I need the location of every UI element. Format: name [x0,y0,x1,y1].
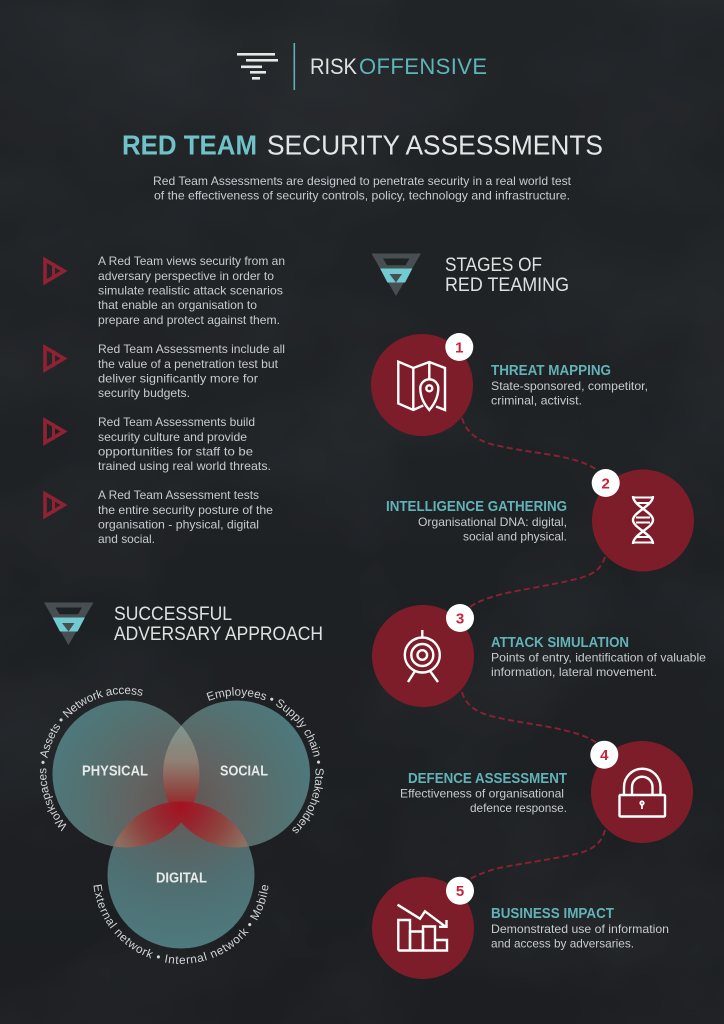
bullet icon 4 [45,494,64,516]
icon: dna [632,496,654,544]
bullet text 1: that enable an organisation to [98,298,257,312]
stage circle 5 [372,877,474,979]
stage text 3 [491,634,706,679]
stage text 4 [400,770,567,815]
stage text 4: defence response. [470,801,567,815]
bullet text 1: prepare and protect against them. [98,313,280,327]
title: SECURITY ASSESSMENTS [267,130,603,160]
logo divider [294,43,295,90]
badge 2 [592,469,620,497]
stage text 2: Organisational DNA: digital, [418,515,567,529]
connector 3 to 4 [462,692,597,743]
arc text: social: Employees • Supply chain • Stakeholders [206,687,324,834]
logo mark: funnel lines [237,53,278,80]
bullet text 4: organisation - physical, digital [98,518,259,532]
connector 2 to 3 [470,557,605,607]
bullet text 2: security budgets. [98,386,190,400]
number 5: 5 [456,883,464,900]
stage text 5: Demonstrated use of information [491,922,669,936]
connector 4 to 5 [470,830,605,879]
heading: successful adversary approach: ADVERSARY APPROACH [114,624,323,645]
bullet text 3: security culture and provide [98,430,247,444]
icon: falling chart [398,905,447,950]
stage text 1: criminal, activist. [491,394,582,408]
stage text 2 [386,498,567,544]
stage text 2: INTELLIGENCE GATHERING [386,498,567,515]
arc text: physical: Workspaces • Assets • Network access [40,688,143,832]
stage text 5: BUSINESS IMPACT [491,905,614,922]
icon: target [405,630,440,682]
intro text: Red Team Assessments are designed to penetrate security in a real world test [153,174,572,188]
stage circle 4 [591,741,693,843]
bullet text 2: Red Team Assessments include all [98,342,285,356]
bullet text 1: A Red Team views security from an [98,254,285,268]
title: RED TEAM [122,130,257,160]
stage text 1: THREAT MAPPING [491,362,611,379]
number 1: 1 [455,340,463,356]
bullet text 4 [98,488,273,546]
bullet text 4: the entire security posture of the [98,503,273,517]
stage text 1: State-sponsored, competitor, [491,379,648,393]
badge 3 [446,604,474,632]
venn label: social: SOCIAL [220,764,268,780]
arc text: digital: External network • Internal network • Mobile [94,884,268,964]
stage circle 3 [372,605,474,707]
bullet text 2 [98,342,285,400]
heading: stages of red teaming: STAGES OF [445,255,542,276]
badge 5 [446,877,474,905]
stage text 3: ATTACK SIMULATION [491,634,629,651]
badge 1 [445,333,473,361]
stage circle 1 [371,334,473,436]
stage 5 [372,877,669,979]
bullet text 4: A Red Team Assessment tests [98,488,259,502]
title [122,130,603,160]
icon: map [398,362,445,410]
venn circle: digital [108,802,254,948]
intro text: of the effectiveness of security controls, policy, technology and infrastructure. [154,188,570,202]
heading: successful adversary approach: SUCCESSFUL [114,604,232,625]
heading: successful adversary approach [114,604,323,645]
number 2: 2 [602,476,610,492]
bullet text 2: deliver significantly more for [98,372,258,386]
stage text 1 [491,362,648,408]
overlap: social and digital [182,802,249,848]
bullet text 3 [98,415,271,473]
stage text 5: and access by adversaries. [491,936,634,950]
stage text 4: Effectiveness of organisational [400,786,564,800]
stage 3 [372,604,706,707]
overlap: physical and social [163,726,200,802]
stage text 3: Points of entry, identification of valuable [491,650,706,664]
bullet list [45,254,285,546]
connector 1 to 2 [462,418,597,470]
bullet text 1: adversary perspective in order to [98,269,274,283]
heading: stages of red teaming: RED TEAMING [445,275,569,296]
icon: stages triangle [372,254,421,296]
icon: padlock [620,769,665,816]
bullet icon 2 [45,347,64,370]
bullet text 3: opportunities for staff to be [98,444,253,458]
bullet icon 1 [45,260,64,282]
bullet text 1 [98,254,285,327]
venn circle: social [163,700,310,848]
number 4: 4 [600,747,609,764]
bullet text 3: Red Team Assessments build [98,415,255,429]
badge 4 [590,741,618,769]
logo wordmark: OFFENSIVE [359,54,487,79]
bullet text 4: and social. [98,532,155,546]
logo wordmark: RISK [310,54,357,79]
bullet text 3: trained using real world threats. [98,459,271,473]
stage 2 [386,469,694,572]
stage circle 2 [592,470,694,572]
bullet text 1: simulate realistic attack scenarios [98,284,283,298]
icon: adversary triangle [44,602,94,645]
venn circle: physical [52,700,200,848]
stage text 3: information, lateral movement. [491,665,657,679]
stage text 4: DEFENCE ASSESSMENT [408,770,567,787]
overlap: physical and digital [113,802,181,848]
venn diagram [40,687,324,964]
stage text 2: social and physical. [463,530,567,544]
bullet icon 3 [45,420,64,443]
stage text 5 [491,905,669,950]
bullet text 2: the value of a penetration test but [98,357,279,371]
number 3: 3 [456,610,464,628]
logo [237,43,487,90]
stage 1 [371,333,648,436]
intro text [153,174,572,202]
venn label: digital: DIGITAL [156,870,207,886]
stage 4 [400,741,693,843]
heading: stages of red teaming [445,255,569,296]
venn label: physical: PHYSICAL [82,764,148,780]
